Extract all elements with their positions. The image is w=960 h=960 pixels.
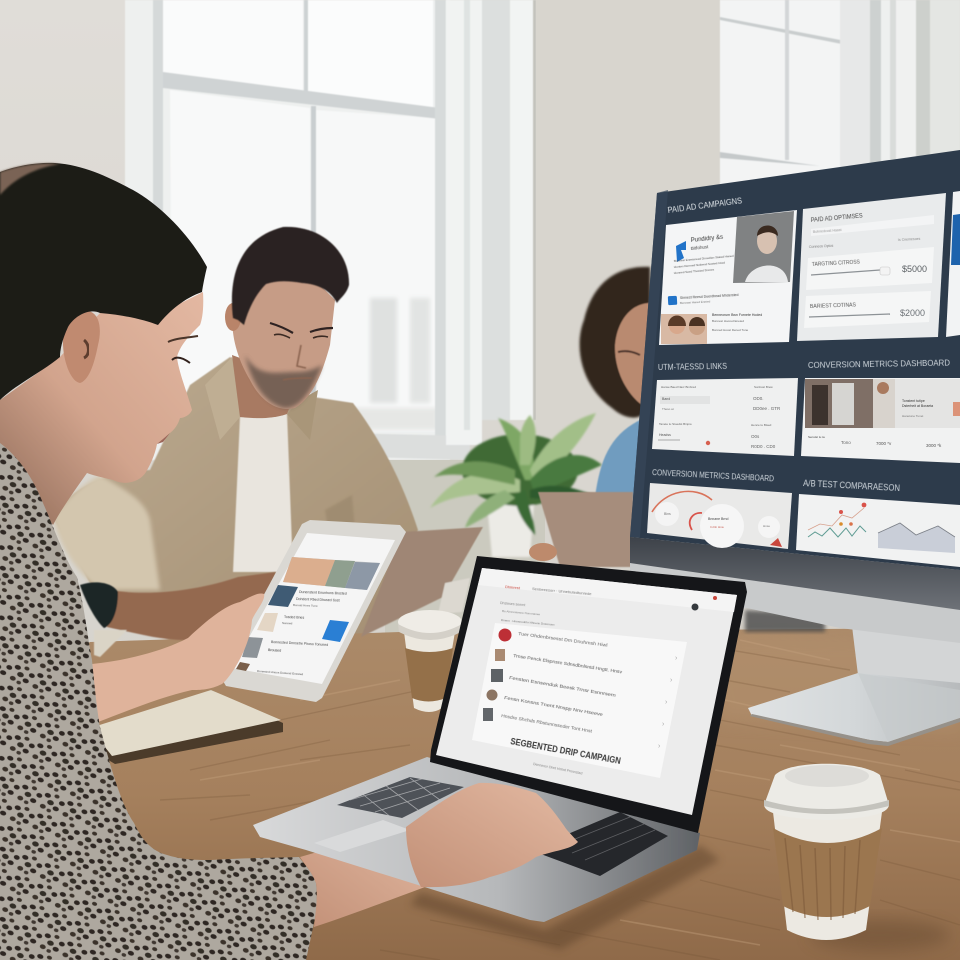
panel: conversion metrics dashboard: Tonstent tutipe: [902, 399, 925, 403]
monitor chin: [630, 537, 960, 610]
panel: paid ad campaigns: Bunnest Hoored Eneted: [712, 319, 744, 323]
painted brick wall: [536, 0, 720, 470]
panel: UTM links table: Band: [662, 397, 670, 401]
slider card: budget: BARIEST COTINAS: [810, 302, 856, 310]
cream sleeve: [53, 475, 160, 590]
pocket shadow: [325, 495, 355, 540]
ear: [63, 311, 100, 383]
man in background: [53, 227, 418, 640]
heading: a/b test comparison: A/B TEST COMPARAESON: [803, 478, 900, 493]
right window: [720, 0, 960, 190]
heading: conversion metrics dashboard second: CONVERSION METRICS DASHBOARD: [652, 468, 774, 483]
blue shirt: [595, 420, 650, 500]
curly hair: [580, 267, 650, 418]
panel: conversion metrics funnel: Hnse: [763, 524, 770, 528]
heading: UTM links: UTM-TAESSD LINKS: [658, 362, 727, 372]
wood grain: [160, 650, 960, 960]
tablet in woman's hand: Dunestnd Hnoos Dostend Enested: [257, 669, 304, 676]
tablet in woman's hand: Tosded Bnes: [284, 615, 305, 620]
list lines of text: Tuer Ohdenbrsesst Dm Dnuhmsh Hiwl: [518, 631, 608, 649]
panel: paid ad options sliders: PAID AD OPTIMSES: [811, 213, 863, 224]
laptop with email drip campaign: Dnenn · Hnnsnuuhhr Hhnenn Dnsnnunn: [501, 618, 555, 627]
panel: conversion metrics funnel: In Dn Hna: [710, 525, 724, 529]
side columns beside window: [446, 0, 536, 445]
panel: conversion metrics dashboard: Hanetune Tunet: [902, 414, 924, 418]
silver lower back of monitor: [630, 562, 960, 643]
eyebrows: [270, 323, 333, 333]
notebook: [90, 690, 283, 764]
panel: UTM links table: Tanete tu Stoedst Binpre: [659, 422, 692, 426]
tablet in woman's hand: [220, 520, 406, 702]
heading: paid ad campaigns: PAID AD CAMPAIGNS: [667, 196, 743, 215]
collar and buttons: [205, 357, 240, 440]
brown tablet and hand held by background person: [529, 492, 633, 567]
panel: a/b test comparison charts: [796, 494, 960, 567]
panel: paid ad options sliders: Conneos Optos: [809, 244, 834, 249]
panel: UTM links table: DD0ee . GTR: [753, 406, 781, 411]
line chart A: [808, 526, 866, 537]
panel: conversion metrics dashboard: Dsterheit at Boraeta: [902, 404, 933, 408]
ear: [225, 303, 241, 331]
panel: conversion metrics dashboard: Tono: [841, 440, 851, 445]
panel: paid ad options sliders: [797, 193, 946, 341]
email list card: Fensten Esnsenduk Beesk Trnsr Esnnrsern: [509, 675, 617, 699]
desktop monitor: [630, 150, 960, 746]
laptop caption: Dennesor Dhnt Hnhst Prnnnstad: [533, 762, 583, 776]
wall under window: [385, 460, 545, 640]
panel: paid ad campaigns: Benneorum Bwn Fornete Hoded: [712, 313, 762, 317]
slider card: targeting: TARGTING CITROSS: [812, 259, 860, 268]
panel: paid ad campaigns: Sinnest Reesd Duerdhead Mhdersted: [680, 293, 739, 300]
forearm: [300, 825, 440, 927]
key gaps: [350, 778, 655, 860]
list chevrons: ›: [658, 743, 661, 750]
eyebrow and eye: [168, 336, 198, 342]
slider card: budget: [804, 291, 931, 328]
brown hair highlight: [0, 163, 60, 195]
panel: conversion metrics dashboard: Senstst tu ta: [808, 435, 825, 439]
panel: UTM links table: [652, 378, 798, 456]
nose and mouth: [283, 345, 312, 380]
panel: UTM links table: Theso at: [662, 407, 674, 411]
laptop with email drip campaign: Senbeeesorr · Uhnebutedtunrede: [532, 586, 592, 596]
panel: paid ad campaigns: [659, 196, 797, 345]
panel: conversion metrics funnel: [647, 483, 792, 549]
monitor screen bezel: [630, 150, 960, 570]
cup shadow: [810, 919, 950, 951]
panel: paid ad campaigns: Pundidry &s: [691, 235, 723, 244]
laptop with email drip campaign: Bo Ahnnnstesne Nonnnanee: [502, 609, 541, 616]
laptop with email drip campaign: Dhinrest: [505, 584, 521, 590]
slider card: targeting: [806, 247, 934, 290]
panel: UTM links table: Headss: [659, 433, 671, 437]
laptop lid: [430, 556, 747, 833]
beard: [245, 355, 322, 408]
panel: paid ad campaigns: Bunnest Enestoreed Dimodlon Stated Haned: [674, 254, 734, 263]
black hair: [0, 163, 207, 400]
watch: [80, 582, 118, 628]
panel: UTM links table: Sonbost Brew: [754, 385, 774, 389]
typing hand: [406, 783, 578, 887]
right key block: [530, 812, 668, 876]
shadow band behind monitor: [745, 610, 825, 632]
list icons: [498, 628, 512, 642]
coffee cup on table behind laptop: [398, 610, 462, 712]
laptop heading: segmented drip campaign: SEGBENTED DRIP CAMPAIGN: [509, 736, 622, 767]
dark hair: [232, 227, 349, 325]
email list card: Hnsdre Shchds Rbstunnsseder Tont Hnst: [501, 713, 593, 734]
left arm and hand: [92, 594, 264, 722]
tablet in woman's hand: Bonnested Dnnsetre Phoso Tonuned: [271, 640, 328, 647]
main window: [125, 0, 470, 460]
wood highlight streaks: [200, 640, 960, 945]
tablet in woman's hand: Broused: [268, 648, 281, 653]
laptop with email drip campaign: [253, 556, 747, 922]
list chevrons: ›: [665, 699, 668, 706]
email list card: Fensn Konsns Tnent Nnspp Nnv Hseeve: [504, 695, 604, 718]
list chevrons: ›: [662, 721, 665, 728]
patterned blouse: [0, 443, 317, 960]
tablet in woman's hand: Sonned: [282, 621, 293, 625]
list chevrons: ›: [670, 677, 673, 684]
panel: UTM links table: Hanse Baed Navr Bmbred: [661, 385, 696, 389]
potted plant: [430, 413, 602, 557]
face: [615, 303, 650, 405]
tablet in woman's hand: Dunenstent Enunhons Brosted: [299, 590, 347, 596]
panel: paid ad campaigns: Hunten Dermed Nutbend Soeted Inted: [674, 261, 725, 269]
left key block: [337, 777, 464, 818]
panel: paid ad campaigns: Bonned Hoost Dened Tune: [712, 328, 749, 332]
tan shirt: [53, 357, 418, 640]
slider card: targeting: $5000: [902, 264, 927, 275]
coffee cup foreground: [764, 764, 889, 940]
panel: paid ad campaigns: Hunned Soed Thosted Dnmes: [674, 267, 715, 275]
eyes: [274, 334, 328, 338]
tablet in woman's hand: Bonstd Hnes Tune: [293, 603, 318, 608]
email list card: Trnse Penck Elspnsre Sdnsdbnlsntd Hngtt. Hnsv: [513, 653, 623, 676]
panel: conversion metrics funnel: Bnnane Brnd: [708, 517, 728, 521]
panel: UTM links table: OD0.: [753, 396, 764, 401]
tablet in woman's hand: Dohdent Rbed Dhused Sost: [296, 597, 340, 603]
list chevrons: ›: [675, 655, 678, 662]
man's forearm, hand and watch: [80, 572, 276, 657]
laptop with email drip campaign: Dhsteses seernt: [500, 601, 525, 607]
laptop cast shadow: [410, 845, 720, 950]
panel: paid ad options sliders: Is Cnemesoes: [898, 237, 921, 242]
panel: paid ad campaigns: Bitfohust: [691, 244, 709, 251]
panel: conversion metrics dashboard: 7000 *v: [876, 441, 892, 446]
wooden table: [0, 628, 960, 960]
panel: conversion metrics dashboard: 3000 *k: [926, 443, 942, 448]
panel: conversion metrics dashboard: [801, 378, 960, 463]
heading: conversion metrics dashboard: CONVERSION METRICS DASHBOARD: [808, 358, 950, 370]
lips shadow: [157, 433, 170, 444]
neck and face: [232, 355, 300, 418]
back laptop: [361, 527, 483, 637]
panel: paid ad campaigns: Beneast Hared Eneted: [680, 299, 711, 305]
trackpad: [314, 820, 410, 852]
monitor stand: [748, 626, 960, 746]
face and neck: [0, 292, 203, 525]
panel: UTM links table: O0s: [751, 434, 760, 439]
person in background with curly hair: [580, 267, 650, 500]
panel: paid ad options sliders: Bohnedcost Haast: [813, 228, 842, 234]
email list card: [472, 623, 687, 778]
slider card: budget: $2000: [900, 308, 925, 319]
panel: UTM links table: R0D0 . CD0: [751, 444, 776, 449]
browser toolbar: [478, 568, 737, 612]
woman in foreground: [0, 163, 440, 960]
white t-shirt: [233, 413, 293, 572]
panel: UTM links table: Hence tu Bised: [751, 423, 772, 427]
area chart B: [878, 523, 955, 553]
panel: conversion metrics funnel: Bins: [664, 512, 671, 516]
panel: cropped blue ad: [946, 191, 960, 337]
keyboard deck: [253, 757, 700, 922]
small paper on table: [94, 630, 127, 657]
